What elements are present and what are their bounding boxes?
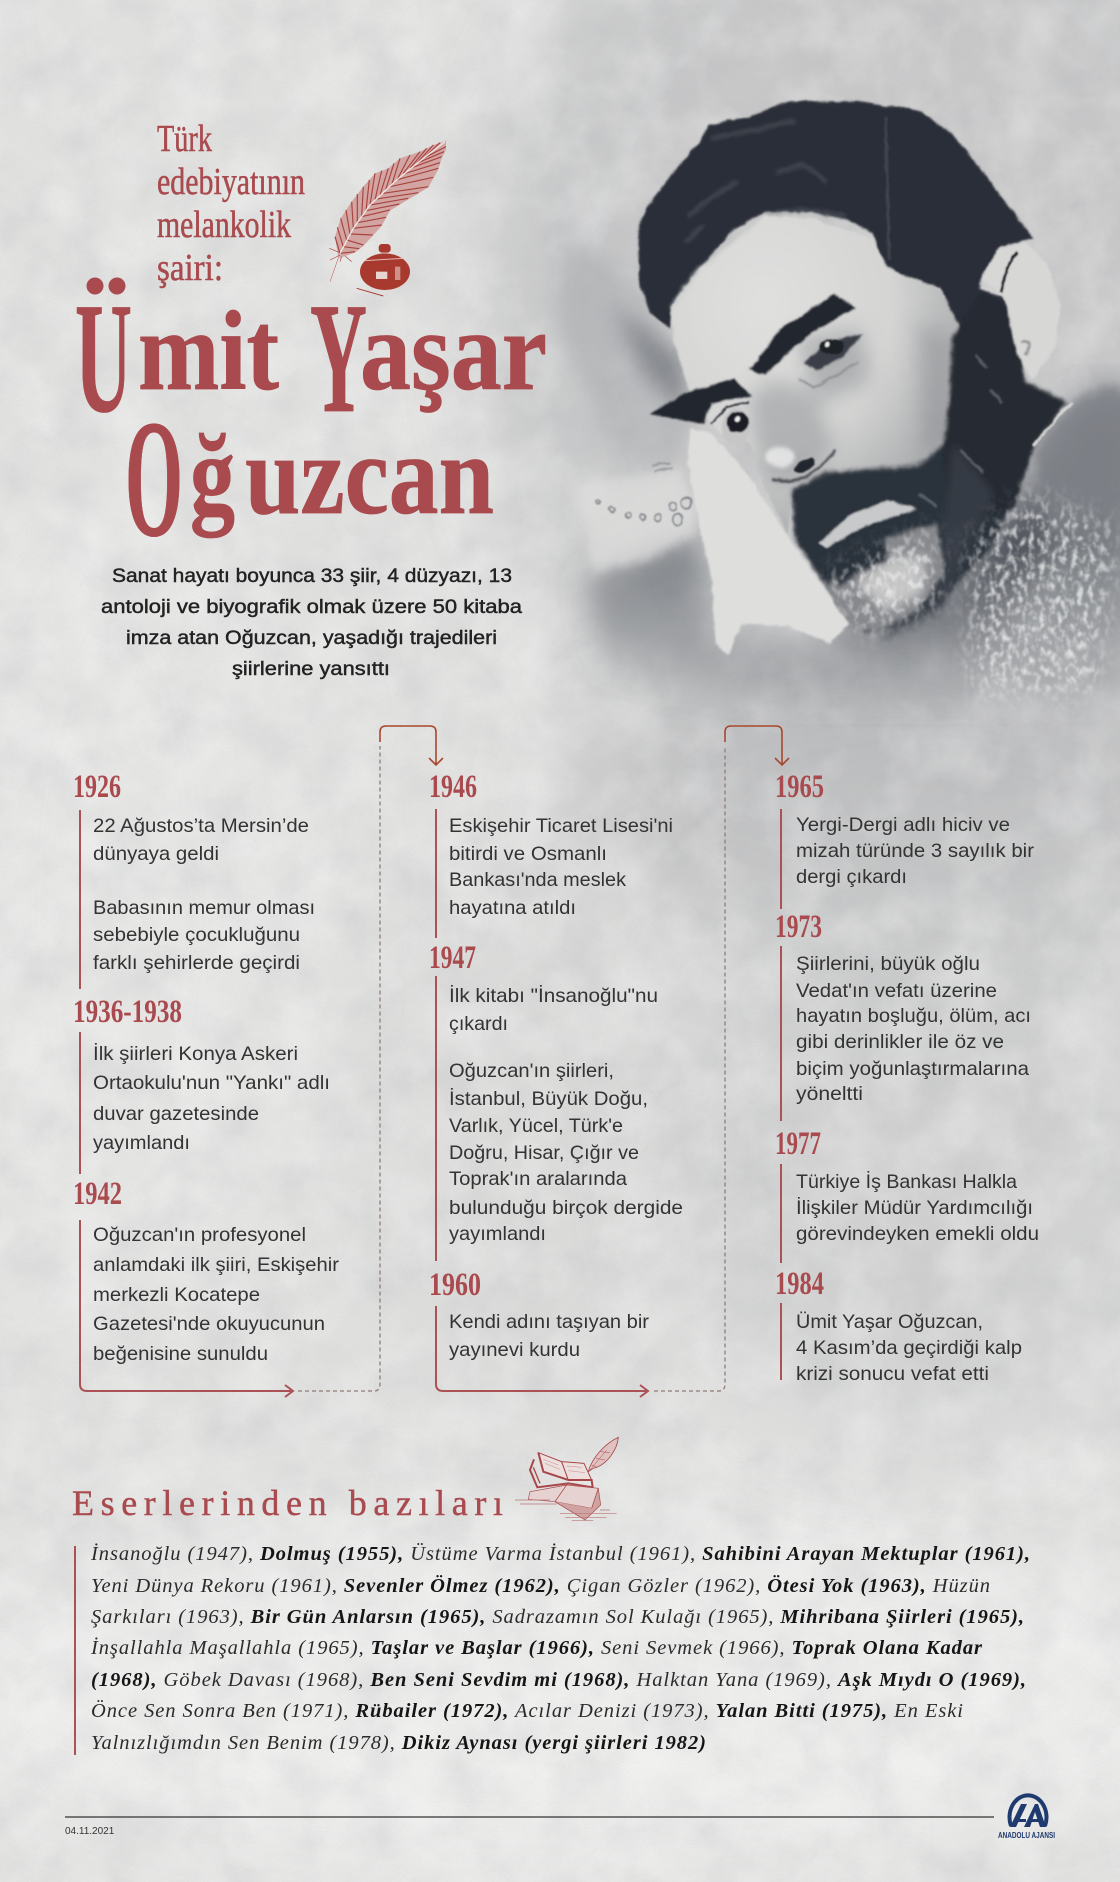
entry 1965: dergi çıkardı — [796, 866, 907, 888]
entry 1973: biçim yoğunlaştırmalarına — [796, 1058, 1029, 1080]
entry 1946: Bankası'nda meslek — [449, 869, 626, 891]
grey goatee — [826, 524, 945, 632]
entry 1947: yayımlandı — [449, 1223, 546, 1245]
icon: open books with quill — [515, 1437, 618, 1521]
entry 1926: farklı şehirlerde geçirdi — [93, 952, 300, 974]
entry 1965: mizah türünde 3 sayılık bir — [796, 840, 1035, 862]
works list: Şarkıları (1963), Bir Gün Anlarsın (1965), Sadrazamın Sol Kulağı (1965), Mihribana Şiirleri (1965), — [91, 1606, 1024, 1628]
entry 1946 — [429, 769, 673, 938]
entry 1984: Ümit Yaşar Oğuzcan, — [796, 1311, 983, 1333]
entry 1947: çıkardı — [449, 1013, 508, 1035]
heading: Eserlerinden bazıları: Eserlerinden bazıları — [72, 1483, 503, 1523]
entry 1973: gibi derinlikler ile öz ve — [796, 1031, 1004, 1053]
entry 1936-1938: İlk şiirleri Konya Askeri — [93, 1042, 298, 1065]
works list: (1968), Göbek Davası (1968), Ben Seni Sevdim mi (1968), Halktan Yana (1969), Aşk Mıydı O (1969), — [91, 1669, 1026, 1691]
entry 1942: merkezli Kocatepe — [93, 1284, 260, 1306]
eyebrows — [650, 294, 857, 424]
face shading — [750, 320, 956, 483]
coat and shoulders — [585, 385, 1120, 719]
works list — [75, 1542, 1030, 1755]
entry 1946: Eskişehir Ticaret Lisesi'ni — [449, 815, 673, 837]
intro paragraph: antoloji ve biyografik olmak üzere 50 kitaba — [101, 596, 522, 618]
entry 1947: Oğuzcan'ın şiirleri, — [449, 1060, 614, 1082]
timeline connector: column 1 to 2 — [80, 726, 443, 1397]
works list: Yalnızlığımdın Sen Benim (1978), Dikiz Aynası (yergi şiirleri 1982) — [91, 1732, 706, 1754]
entry 1942 — [73, 1176, 340, 1365]
entry 1936-1938: 1936-1938 — [73, 994, 182, 1030]
entry 1947: İlk kitabı "İnsanoğlu"nu — [449, 984, 658, 1007]
entry 1942: beğenisine sunuldu — [93, 1343, 268, 1365]
beard and moustache — [792, 303, 1065, 632]
eyes — [711, 334, 863, 445]
intro paragraph: Sanat hayatı boyunca 33 şiir, 4 düzyazı, 13 — [112, 565, 512, 587]
white handkerchief — [688, 429, 849, 654]
entry 1942: Gazetesi'nde okuyucunun — [93, 1313, 325, 1335]
portrait photo of Ümit Yaşar Oğuzcan — [554, 101, 1120, 719]
smoky hand — [554, 233, 696, 572]
entry 1947 — [429, 940, 683, 1261]
face — [671, 215, 960, 535]
entry 1942: 1942 — [73, 1176, 122, 1212]
entry 1936-1938: yayımlandı — [93, 1132, 190, 1154]
entry 1936-1938: duvar gazetesinde — [93, 1103, 259, 1125]
entry 1947: 1947 — [429, 940, 476, 976]
entry 1946: hayatına atıldı — [449, 897, 576, 919]
timeline column 2 — [429, 769, 683, 1361]
main title: Ümit Yaşar Oğuzcan: O — [125, 386, 183, 572]
logo: Anadolu Ajansı: ANADOLU AJANSI — [998, 1830, 1055, 1840]
entry 1926: 1926 — [73, 769, 121, 805]
entry 1984: krizi sonucu vefat etti — [796, 1363, 989, 1385]
entry 1947: bulunduğu birçok dergide — [449, 1197, 683, 1219]
main title: Ümit Yaşar Oğuzcan: Ü — [75, 271, 132, 446]
main title: Ümit Yaşar Oğuzcan: uzcan — [245, 413, 494, 538]
entry 1973: hayatın boşluğu, ölüm, acı — [796, 1005, 1031, 1027]
entry 1946: bitirdi ve Osmanlı — [449, 843, 607, 865]
entry 1960: Kendi adını taşıyan bir — [449, 1311, 650, 1333]
main title: Ümit Yaşar Oğuzcan: ğ — [190, 413, 235, 538]
publication date: 04.11.2021 — [65, 1826, 115, 1837]
works list: İnşallahla Maşallahla (1965), Taşlar ve Başlar (1966), Seni Sevmek (1966), Toprak Olana Kadar — [90, 1636, 983, 1659]
entry 1984: 1984 — [775, 1266, 824, 1302]
entry 1977: görevindeyken emekli oldu — [796, 1223, 1039, 1245]
entry 1942: anlamdaki ilk şiiri, Eskişehir — [93, 1254, 340, 1276]
entry 1926 — [73, 769, 315, 989]
entry 1947: İstanbul, Büyük Doğu, — [449, 1087, 648, 1110]
hair highlights — [685, 121, 845, 242]
entry 1973: Şiirlerini, büyük oğlu — [796, 953, 980, 975]
main title: Ümit Yaşar Oğuzcan: aşar — [360, 289, 547, 414]
entry 1973 — [775, 909, 1031, 1121]
entry 1965: 1965 — [775, 769, 824, 805]
intro paragraph: imza atan Oğuzcan, yaşadığı trajedileri — [126, 627, 497, 649]
entry 1936-1938: Ortaokulu'nun "Yankı" adlı — [93, 1072, 330, 1094]
entry 1946: 1946 — [429, 769, 477, 805]
pearl bracelet — [597, 498, 691, 525]
lower lip — [819, 500, 918, 548]
entry 1947: Doğru, Hisar, Çığır ve — [449, 1142, 639, 1164]
entry 1973: 1973 — [775, 909, 822, 945]
subtitle: Türk edebiyatının melankolik şairi: şairi: — [157, 247, 223, 289]
sideburn flecks — [918, 355, 1002, 507]
collar — [1033, 403, 1071, 446]
entry 1977 — [775, 1126, 1039, 1263]
hair — [639, 101, 1033, 342]
entry 1984: 4 Kasım’da geçirdiği kalp — [796, 1337, 1022, 1359]
ear — [981, 242, 1060, 380]
entry 1926: dünyaya geldi — [93, 843, 219, 865]
main title: Ümit Yaşar Oğuzcan — [75, 271, 547, 572]
entry 1977: Türkiye İş Bankası Halkla — [796, 1170, 1017, 1193]
entry 1977: 1977 — [775, 1126, 821, 1162]
entry 1936-1938 — [73, 994, 330, 1174]
entry 1965 — [775, 769, 1035, 909]
works list: İnsanoğlu (1947), Dolmuş (1955), Üstüme Varma İstanbul (1961), Sahibini Arayan Mektuplar (1961), — [90, 1542, 1030, 1565]
entry 1973: yöneltti — [796, 1083, 863, 1105]
timeline connector: column 2 to 3 — [436, 726, 789, 1397]
main title: Ümit Yaşar Oğuzcan: Y — [310, 271, 367, 446]
footer rule — [65, 1816, 994, 1818]
subtitle: Türk edebiyatının melankolik şairi — [157, 118, 305, 289]
main title: Ümit Yaşar Oğuzcan: mit — [138, 289, 279, 414]
intro paragraph — [101, 565, 522, 680]
logo: Anadolu Ajansı — [998, 1795, 1055, 1840]
entry 1960: 1960 — [429, 1267, 481, 1303]
entry 1977: İlişkiler Müdür Yardımcılığı — [796, 1196, 1033, 1219]
nose — [765, 446, 836, 481]
timeline column 3 — [775, 769, 1039, 1385]
entry 1960: yayınevi kurdu — [449, 1339, 580, 1361]
timeline column 1 — [73, 769, 340, 1365]
entry 1984 — [775, 1266, 1022, 1385]
works list: Yeni Dünya Rekoru (1961), Sevenler Ölmez (1962), Çigan Gözler (1962), Ötesi Yok (1963), Hüzün — [91, 1574, 990, 1597]
subtitle: Türk edebiyatının melankolik şairi: Türk — [157, 118, 212, 160]
entry 1973: Vedat'ın vefatı üzerine — [796, 980, 997, 1002]
entry 1947: Toprak'ın aralarında — [449, 1168, 627, 1190]
entry 1942: Oğuzcan'ın profesyonel — [93, 1224, 306, 1246]
entry 1960 — [429, 1267, 650, 1361]
entry 1926: Babasının memur olması — [93, 897, 315, 919]
sideburn — [943, 294, 1065, 528]
ring — [652, 462, 673, 471]
intro paragraph: şiirlerine yansıttı — [232, 658, 390, 680]
entry 1947: Varlık, Yücel, Türk'e — [449, 1115, 623, 1137]
icon: quill feather and inkwell — [329, 141, 446, 296]
works list: Önce Sen Sonra Ben (1971), Rübailer (1972), Acılar Denizi (1973), Yalan Bitti (1975), En Eski — [91, 1699, 963, 1722]
subtitle: Türk edebiyatının melankolik şairi: melankolik — [157, 204, 291, 246]
entry 1965: Yergi-Dergi adlı hiciv ve — [796, 814, 1010, 836]
entry 1926: sebebiyle çocukluğunu — [93, 924, 300, 946]
coat and beard grain — [826, 494, 1117, 693]
entry 1926: 22 Ağustos’ta Mersin’de — [93, 815, 309, 837]
subtitle: Türk edebiyatının melankolik şairi: edebiyatının — [157, 161, 305, 203]
